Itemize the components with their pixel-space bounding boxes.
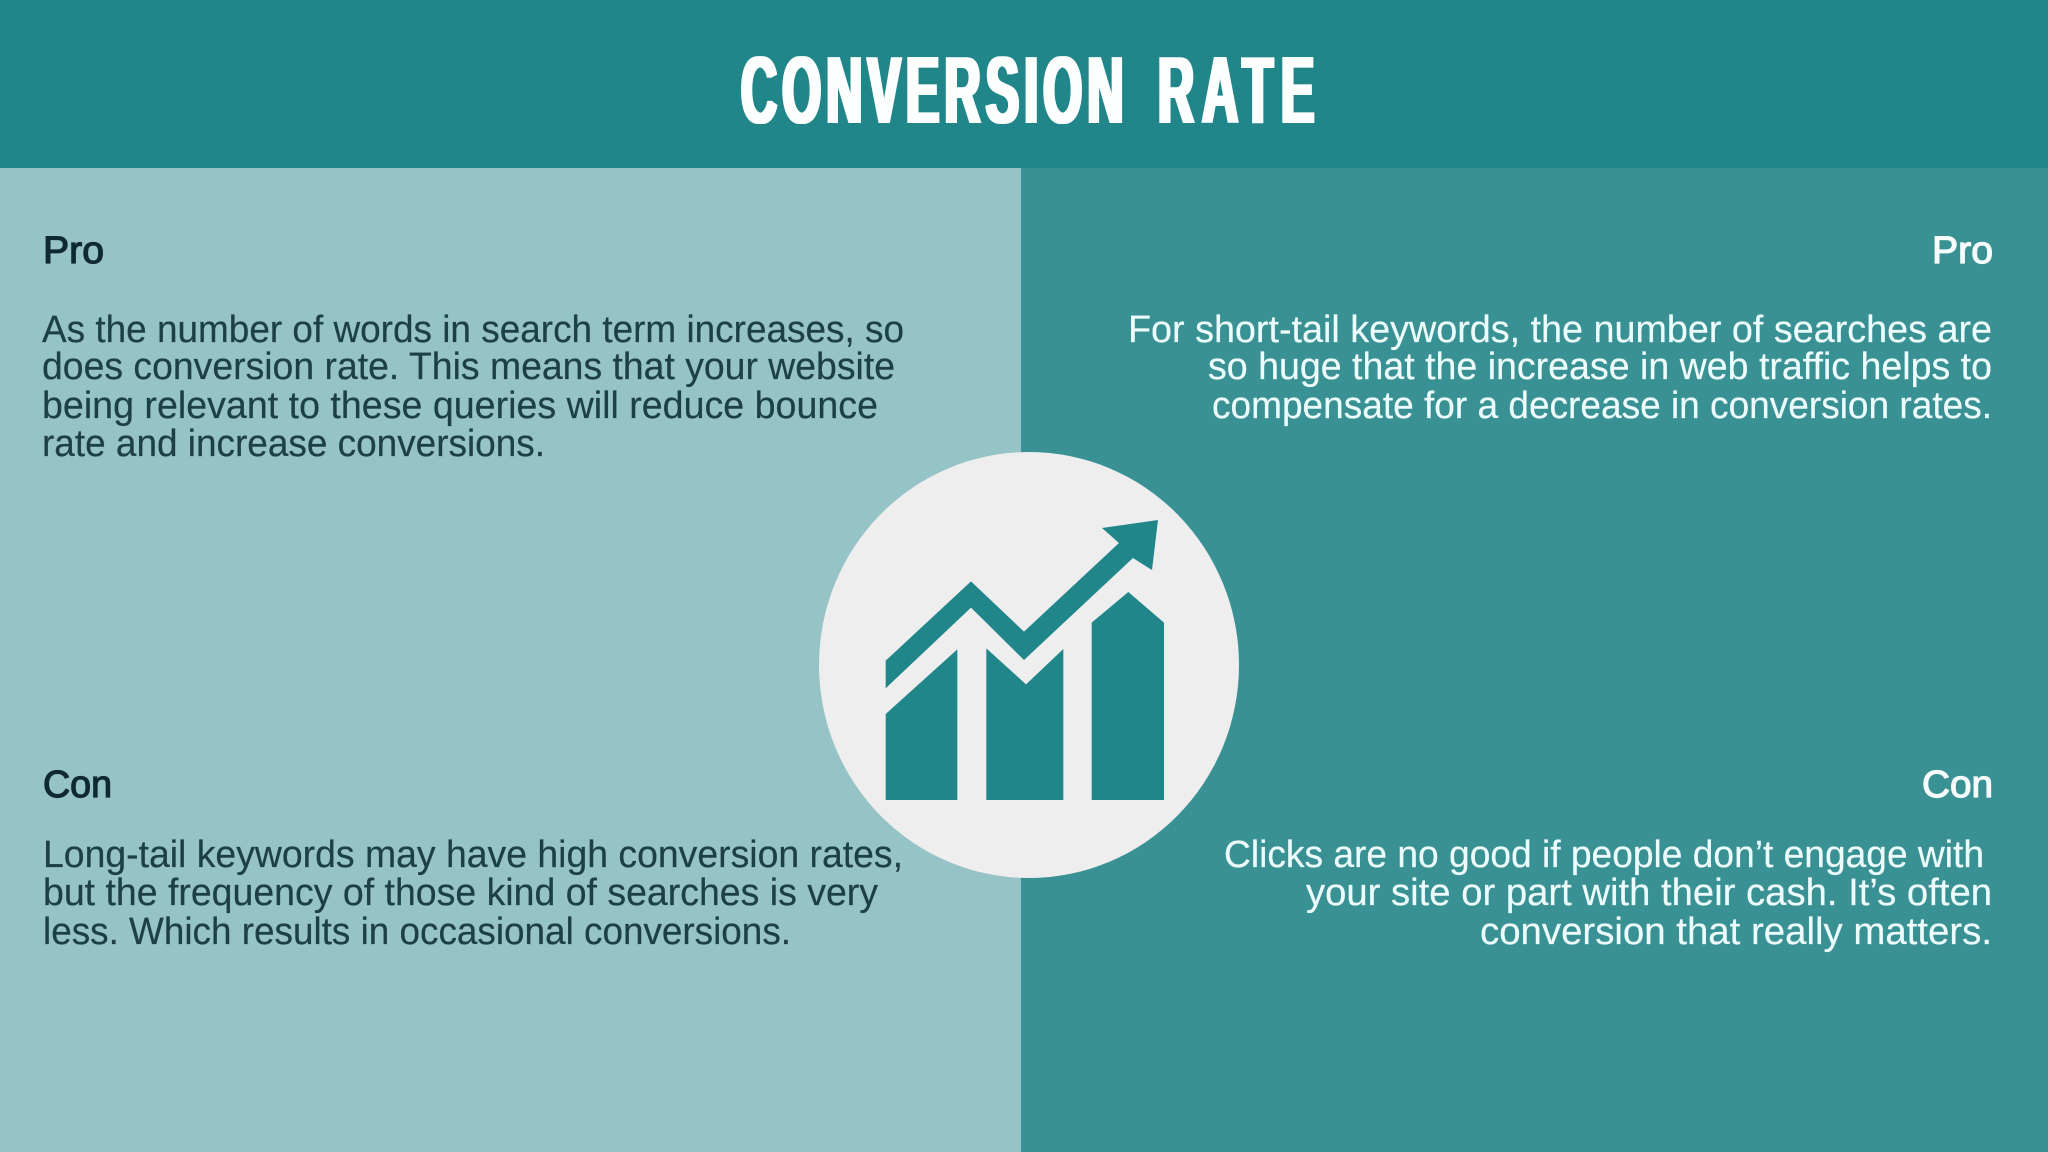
icon: bar chart with rising arrow <box>886 520 1164 800</box>
paragraph: left pro: rate and increase conversions. <box>42 423 545 465</box>
heading: left con: Con <box>43 764 112 806</box>
central circle with growth chart icon <box>819 452 1239 878</box>
heading: right con: Con <box>1922 764 1993 806</box>
paragraph: left con: less. Which results in occasional conversions. <box>43 911 791 953</box>
paragraph: left con <box>43 834 903 953</box>
header band <box>0 0 2048 168</box>
text block: right pro <box>1128 230 1993 427</box>
paragraph: left pro: As the number of words in search term increases, so <box>42 309 904 351</box>
heading: left pro: Pro <box>43 230 104 272</box>
paragraph: left con: Long-tail keywords may have high conversion rates, <box>43 834 903 876</box>
icon: right bar <box>1092 592 1164 800</box>
paragraph: left con: but the frequency of those kind of searches is very <box>43 872 878 914</box>
paragraph: left pro: does conversion rate. This means that your website <box>42 346 895 388</box>
paragraph: right pro: For short-tail keywords, the number of searches are <box>1128 309 1992 351</box>
text block: left con <box>43 764 903 953</box>
paragraph: right pro <box>1128 309 1992 427</box>
icon: middle bar <box>986 648 1063 800</box>
paragraph: right pro: compensate for a decrease in conversion rates. <box>1212 385 1992 427</box>
title <box>741 38 1322 144</box>
title: RATE <box>1158 38 1322 144</box>
heading: right pro: Pro <box>1932 230 1993 272</box>
title: CONVERSION <box>741 38 1129 144</box>
paragraph: right con: your site or part with their cash. It’s often <box>1306 872 1992 914</box>
paragraph: right con: Clicks are no good if people don’t engage with <box>1224 834 1984 876</box>
paragraph: left pro: being relevant to these queries will reduce bounce <box>42 385 878 427</box>
icon: rising arrow <box>886 520 1158 688</box>
paragraph: right con: conversion that really matters. <box>1480 911 1992 953</box>
paragraph: left pro <box>42 309 904 465</box>
paragraph: right pro: so huge that the increase in web traffic helps to <box>1208 346 1992 388</box>
panel: left pros and cons background <box>0 168 1021 1152</box>
panel: right pros and cons background <box>1021 168 2048 1152</box>
text block: right con <box>1224 764 1993 953</box>
icon: left bar <box>886 649 957 800</box>
text block: left pro <box>42 230 904 465</box>
paragraph: right con <box>1224 834 1992 953</box>
